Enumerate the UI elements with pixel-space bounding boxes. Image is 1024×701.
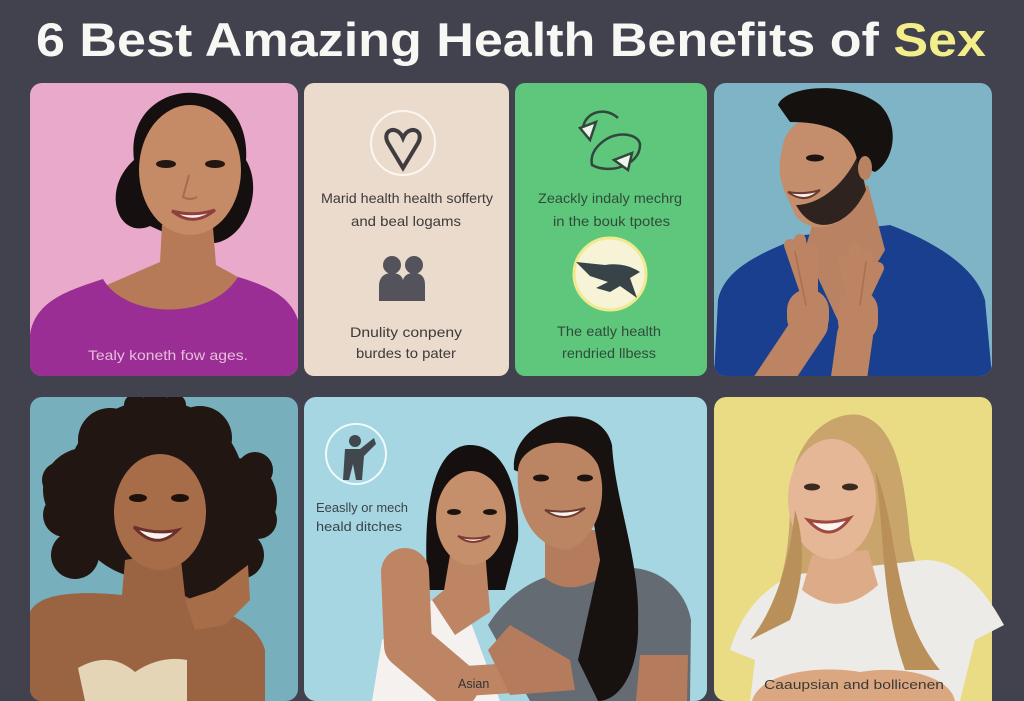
text block: third tip second line: in the bouk tpotes [553,213,670,229]
man's eyes [533,474,593,482]
woman's arm [405,572,560,685]
icon: person in circle [326,424,386,484]
hair strand front [750,470,940,670]
man's arms [488,625,688,701]
man's grey shirt [488,568,691,701]
beard [796,155,866,225]
hair [778,88,893,172]
shoulders and neck [30,550,265,701]
neck and chest [107,224,239,310]
woman's neck and chest [432,550,490,635]
panel: blonde woman on yellow [714,397,1004,701]
woman's face [436,471,506,565]
woman's smile [458,536,490,542]
blonde hair [750,414,941,680]
text block: fifth tip: Eeaslly or mech [316,501,408,515]
text block: fourth tip second line: rendried llbess [562,345,656,361]
panel: couple on light blue [304,397,707,701]
man's neck [545,530,605,587]
face [139,105,241,235]
cream top [78,659,187,701]
ear [858,156,872,180]
curly hair [42,394,277,610]
purple shirt [30,277,298,376]
text block: first tip second line: and beal logams [351,213,461,229]
icon: heart in circle [371,111,435,175]
text block: first tip: Marid health health sofferty [321,190,493,206]
text block: fourth tip: The eatly health [557,323,661,339]
hands [752,669,955,701]
left hand and forearm [770,240,812,385]
face [788,439,876,559]
white top [730,560,1004,701]
icon: bird in circle [574,238,646,310]
panel: green health tips [515,83,707,376]
facial features [156,160,225,219]
man's smile [545,508,585,517]
text block: second tip: Dnulity conpeny [350,324,462,340]
face [780,115,866,227]
text block: fifth tip second line: heald ditches [316,520,402,534]
caption: Caaupsian and bollicenen [764,677,944,692]
smile [808,518,850,532]
text block: second tip second line: burdes to pater [356,345,456,361]
face [114,454,206,570]
man's face [518,443,602,550]
woman's hair [426,445,518,590]
woman's eyes [447,509,497,515]
neck [802,550,878,604]
white top [372,600,500,701]
panel: woman with curly hair [30,394,298,701]
title: 6 Best Amazing Health Benefits of Sex [36,13,986,66]
eyes [804,484,858,490]
hand [185,565,250,630]
icon: two people [379,256,425,301]
text block: third tip: Zeackly indaly mechrg [538,190,682,206]
blue shirt [714,225,992,376]
right hand and forearm [844,250,878,385]
facial features [129,494,189,540]
icon: circular arrows [580,112,640,170]
panel: man in blue shirt [714,83,992,385]
woman's hair [116,93,253,243]
neck and open collar [805,185,885,325]
shirt caption: Tealy koneth fow ages. [88,347,248,363]
panel: woman in purple shirt [30,83,298,376]
man's long hair [514,416,638,701]
caption: Asian [458,677,489,691]
eye [806,154,824,162]
panel: beige health tips [304,83,509,376]
smile [788,190,820,198]
